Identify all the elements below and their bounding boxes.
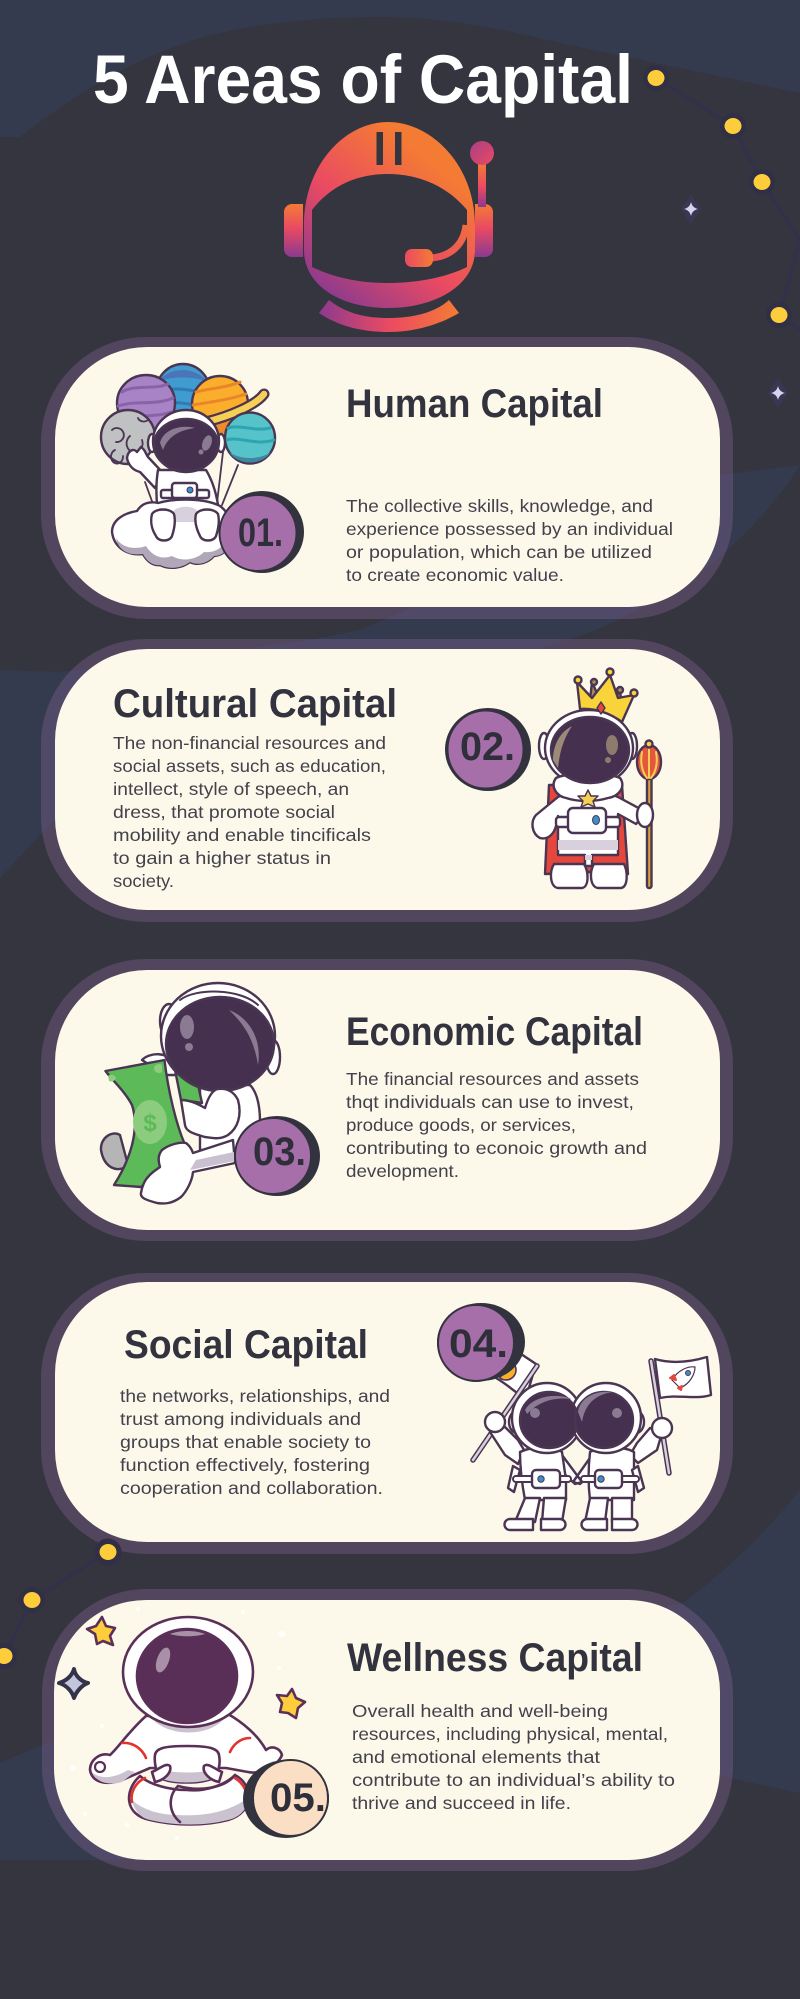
panel: human capital bbox=[41, 337, 733, 619]
text: social capital description: function effectively, fostering bbox=[120, 1455, 370, 1475]
text: cultural capital description: intellect, style of speech, an bbox=[113, 779, 349, 799]
text: cultural capital description: dress, that promote social bbox=[113, 802, 335, 822]
text: social capital description bbox=[120, 1386, 390, 1498]
badge: 05: 05. bbox=[270, 1776, 326, 1820]
text: cultural capital description: society. bbox=[113, 871, 174, 891]
heading: economic capital: Economic Capital bbox=[346, 1010, 643, 1054]
background shape: top sky bbox=[0, 0, 800, 137]
background shape: lower band bbox=[0, 1490, 800, 1860]
icon: sparkle star upper bbox=[681, 194, 701, 224]
text: cultural capital description bbox=[113, 733, 386, 891]
text: social capital description: cooperation and collaboration. bbox=[120, 1478, 383, 1498]
badge: 02: 02. bbox=[460, 725, 515, 769]
text: wellness capital description: and emotional elements that bbox=[352, 1747, 600, 1767]
text: economic capital description bbox=[346, 1069, 647, 1181]
text: cultural capital description: mobility and enable tincificals bbox=[113, 825, 371, 845]
icon: astronaut helmet bbox=[284, 122, 494, 332]
badge: 02 bbox=[445, 708, 531, 791]
badge: 01: 01. bbox=[238, 511, 283, 555]
text: wellness capital description: resources, including physical, mental, bbox=[352, 1724, 668, 1744]
text: human capital description: or population, which can be utilized bbox=[346, 542, 652, 562]
text: economic capital description: The financial resources and assets bbox=[346, 1069, 639, 1089]
badge: 03: 03. bbox=[253, 1130, 306, 1174]
heading: human capital: Human Capital bbox=[346, 382, 603, 426]
badge: 04 bbox=[437, 1303, 525, 1381]
title: 5 Areas of Capital bbox=[93, 41, 633, 118]
text: human capital description: experience possessed by an individual bbox=[346, 519, 673, 539]
heading: cultural capital: Cultural Capital bbox=[113, 682, 397, 726]
panel: social capital bbox=[41, 1273, 733, 1554]
icon: yellow star left bbox=[87, 1617, 115, 1645]
background shape: middle band bbox=[0, 465, 800, 878]
text: economic capital description: development. bbox=[346, 1161, 459, 1181]
text: social capital description: groups that enable society to bbox=[120, 1432, 371, 1452]
heading: social capital: Social Capital bbox=[124, 1323, 368, 1367]
text: economic capital description: produce goods, or services, bbox=[346, 1115, 576, 1135]
decoration: white dots bbox=[70, 1607, 285, 1840]
text: human capital description bbox=[346, 496, 673, 585]
badge: 01 bbox=[220, 491, 304, 573]
text: wellness capital description: Overall health and well-being bbox=[352, 1701, 608, 1721]
text: economic capital description: contributing to econoic growth and bbox=[346, 1138, 647, 1158]
text: wellness capital description: contribute to an individual’s ability to bbox=[352, 1770, 675, 1790]
panel: wellness capital bbox=[42, 1589, 733, 1871]
icon: two astronauts with flags bbox=[473, 1352, 711, 1530]
text: cultural capital description: to gain a higher status in bbox=[113, 848, 331, 868]
text: economic capital description: thqt individuals can use to invest, bbox=[346, 1092, 634, 1112]
constellation: top right bbox=[643, 65, 800, 330]
badge: 04: 04. bbox=[449, 1322, 508, 1366]
icon: yellow star right bbox=[277, 1689, 305, 1718]
text: social capital description: the networks, relationships, and bbox=[120, 1386, 390, 1406]
icon: dark sparkle bbox=[59, 1669, 88, 1698]
text: wellness capital description: thrive and succeed in life. bbox=[352, 1793, 571, 1813]
badge: 03 bbox=[234, 1116, 320, 1196]
text: cultural capital description: social assets, such as education, bbox=[113, 756, 386, 776]
panel: economic capital bbox=[41, 959, 733, 1241]
text: wellness capital description bbox=[352, 1701, 675, 1813]
icon: astronaut reading money bbox=[101, 983, 280, 1203]
icon: sparkle star lower bbox=[768, 378, 788, 408]
icon: astronaut with planet balloons bbox=[101, 364, 275, 568]
icon: astronaut reading money: $ bbox=[143, 1110, 157, 1137]
text: social capital description: trust among individuals and bbox=[120, 1409, 361, 1429]
icon: astronaut king with crown and scepter bbox=[533, 668, 661, 888]
text: human capital description: The collective skills, knowledge, and bbox=[346, 496, 653, 516]
text: human capital description: to create economic value. bbox=[346, 565, 564, 585]
heading: wellness capital: Wellness Capital bbox=[347, 1636, 643, 1680]
text: cultural capital description: The non-financial resources and bbox=[113, 733, 386, 753]
panel: cultural capital bbox=[41, 639, 733, 922]
constellation: bottom left bbox=[0, 1538, 122, 1669]
badge: 05 bbox=[243, 1760, 329, 1838]
icon: meditating astronaut bbox=[90, 1617, 282, 1824]
